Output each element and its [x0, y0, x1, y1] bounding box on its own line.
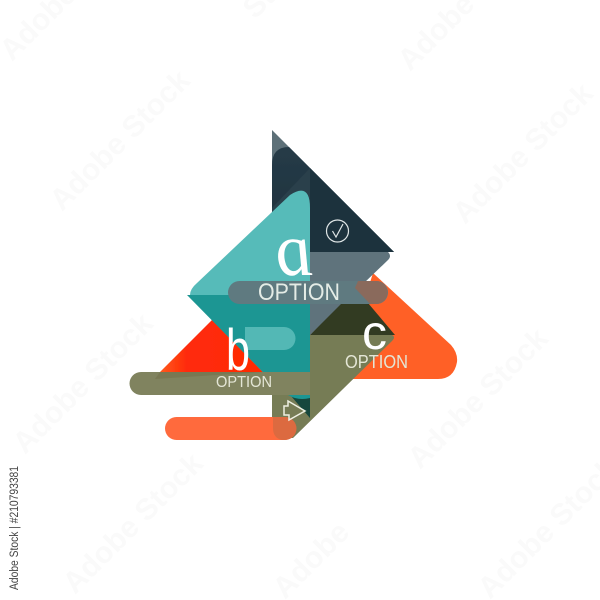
panel: b red triangle — [160, 320, 263, 372]
watermark: Adobe Stock — [402, 322, 555, 475]
option b: OPTION — [216, 374, 272, 391]
panel: a grey bar — [228, 281, 388, 304]
panel: a teal upper half — [190, 191, 310, 295]
option a: OPTION — [258, 279, 340, 306]
panel: c orange triangle — [340, 273, 457, 379]
option c: OPTION — [345, 352, 408, 372]
watermark: Adobe Stock — [57, 447, 210, 600]
panel: c dark olive triangle — [310, 303, 395, 335]
icon: arrow — [284, 401, 305, 420]
diagram — [130, 130, 457, 440]
watermark: Adobe Stock — [44, 64, 197, 217]
watermark: Adobe Stock — [7, 307, 160, 460]
panel: orange bar — [165, 417, 296, 440]
letter b: b — [226, 318, 250, 383]
letter a: a — [262, 207, 321, 292]
panel: c olive lower band — [272, 335, 394, 438]
panel: a teal lower half — [187, 295, 310, 420]
dark overlap at teal tip — [291, 396, 310, 418]
panel: a dark triangle — [272, 130, 394, 252]
panel: b olive bar — [130, 372, 310, 395]
letter c: c — [362, 307, 387, 360]
watermark: Adobe Stock — [447, 77, 600, 230]
panel: a grey lower band — [310, 252, 390, 335]
panel: b light teal bar — [245, 327, 296, 350]
side credit: Adobe Stock | #210793381 — [9, 466, 21, 590]
teal tip rounded end — [288, 395, 310, 399]
icon: check — [326, 220, 348, 242]
